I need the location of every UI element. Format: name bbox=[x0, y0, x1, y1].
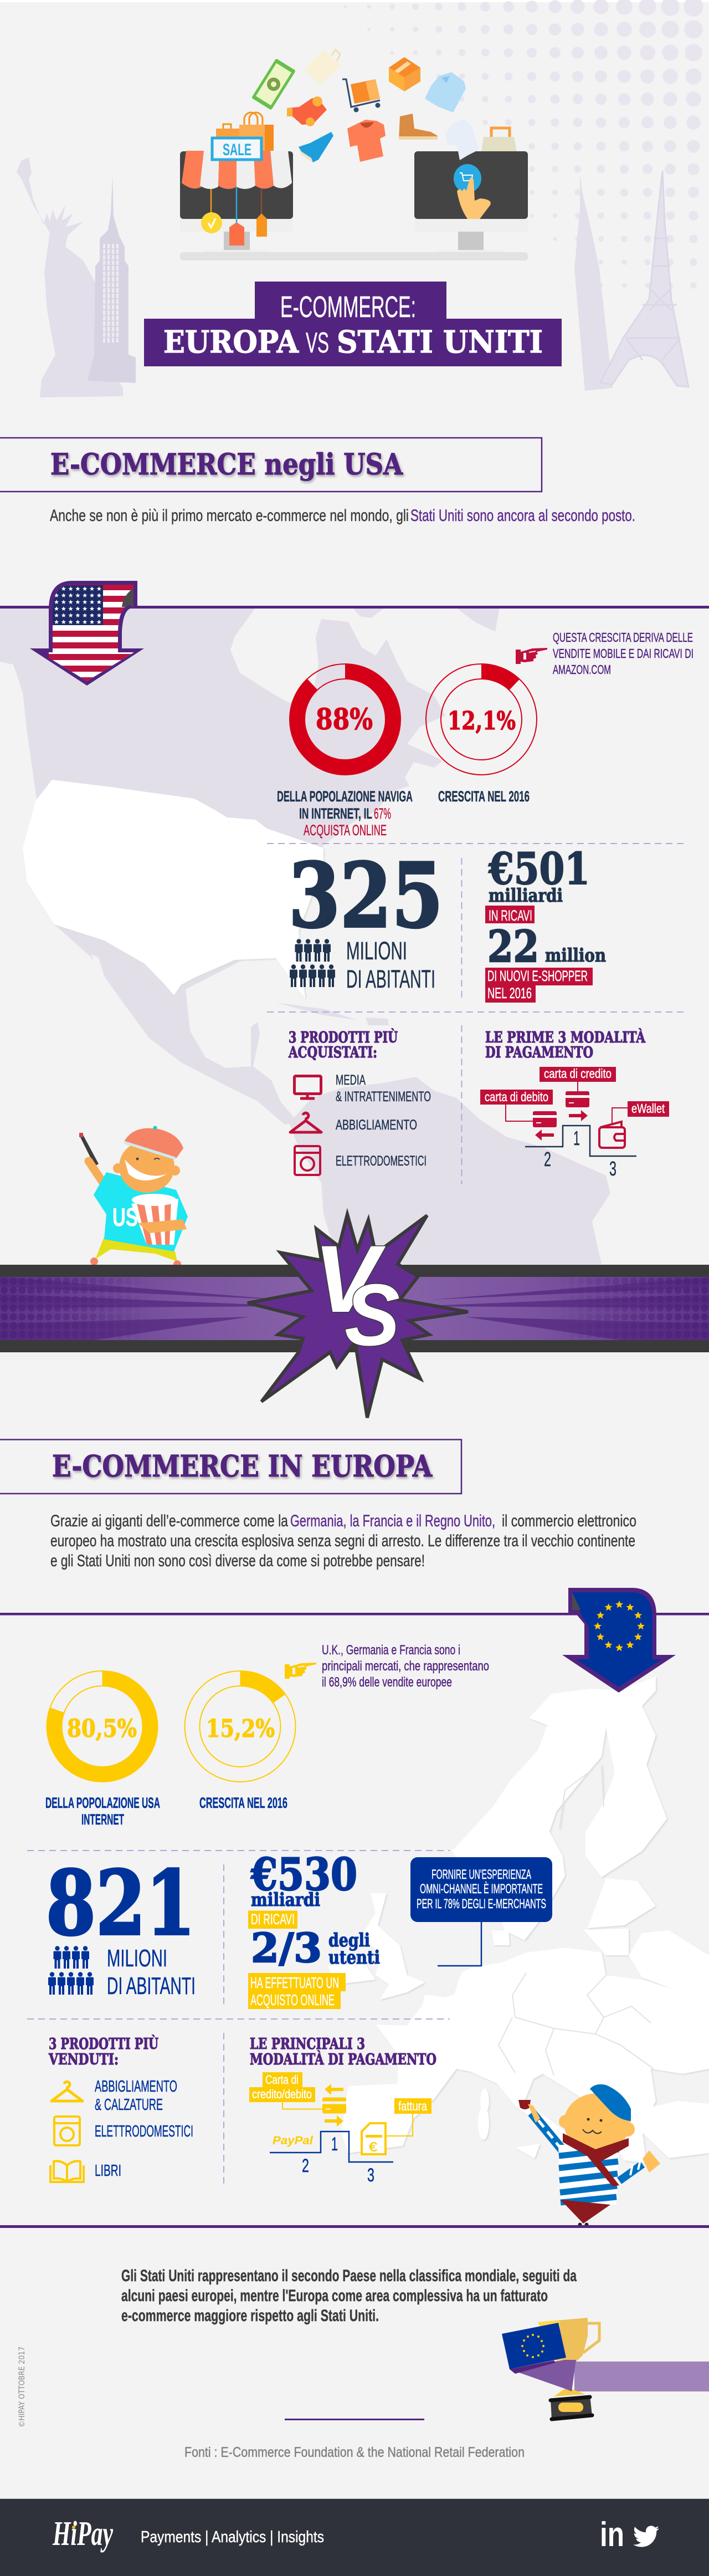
icon: box bbox=[389, 57, 420, 91]
stat: 530 billion revenue: miliardi bbox=[251, 1889, 320, 1910]
illustration: French mascot bbox=[518, 2084, 660, 2227]
logo: HiPay bbox=[52, 2515, 113, 2553]
logo: HiPay: HiPay bbox=[52, 2515, 113, 2553]
cap bbox=[124, 1126, 183, 1158]
stat: 530 billion revenue bbox=[248, 1848, 357, 1929]
credit and debit card: credito/debito bbox=[252, 2087, 312, 2101]
icon: cart with boxes bbox=[342, 79, 380, 112]
chart: 12,1 percent donut: 12,1% bbox=[448, 706, 516, 735]
credit card: carta di credito bbox=[544, 1066, 612, 1081]
podium: 2 bbox=[544, 1148, 551, 1171]
icon: socks bbox=[287, 96, 327, 126]
red scarf bbox=[561, 2133, 629, 2227]
panel: top products USA: 3 PRODOTTI PIÙ bbox=[289, 1028, 398, 1046]
paypal: PayPal bbox=[273, 2134, 314, 2147]
icon: orange t-shirt bbox=[347, 120, 386, 162]
head and face bbox=[113, 1141, 180, 1193]
illustration: trophy with EU flag bbox=[502, 2318, 709, 2420]
VS lettering bbox=[314, 1226, 400, 1364]
heading: e-commerce USA bbox=[0, 438, 542, 492]
stat: 22 million new shoppers: NEL 2016 bbox=[487, 985, 532, 1001]
stat: 530 billion revenue: DI RICAVI bbox=[251, 1911, 295, 1928]
versus band bbox=[0, 1265, 709, 1352]
podium Europe: 1 bbox=[331, 2134, 338, 2155]
stat: 22 million new shoppers bbox=[485, 922, 606, 1003]
shelf bbox=[180, 252, 528, 260]
VS lettering: S bbox=[345, 1266, 400, 1364]
podium bbox=[525, 1126, 636, 1180]
icon: book bbox=[50, 2161, 84, 2182]
illustration: USA mascot bbox=[79, 1126, 188, 1268]
panel: top products Europe: ELETTRODOMESTICI bbox=[95, 2123, 193, 2140]
icon: banknote bbox=[251, 58, 296, 110]
icon: pointing hand yellow bbox=[285, 1663, 316, 1679]
halftone dot background bbox=[344, 0, 703, 289]
beret bbox=[590, 2084, 631, 2121]
stat: two thirds of users: HA EFFETTUATO UN bbox=[250, 1974, 339, 1991]
cart button and hand bbox=[454, 164, 491, 219]
panel: top products Europe: 3 PRODOTTI PIÙ bbox=[49, 2034, 158, 2053]
pants and feet bbox=[90, 1237, 181, 1268]
panel: top products USA bbox=[288, 1028, 431, 1175]
panel: payment methods USA: LE PRIME 3 MODALITÀ bbox=[485, 1028, 646, 1046]
panel: top products USA: ABBIGLIAMENTO bbox=[336, 1117, 417, 1133]
big ben silhouette bbox=[574, 175, 613, 391]
statue of liberty silhouette bbox=[17, 157, 123, 397]
debit card: carta di debito bbox=[485, 1090, 548, 1104]
stat: 22 million new shoppers: million bbox=[545, 944, 606, 966]
flag shadow bbox=[510, 2360, 576, 2391]
pen and raised arm bbox=[79, 1133, 105, 1186]
icon: white shirt bbox=[445, 119, 479, 160]
title: E-COMMERCE: bbox=[280, 290, 416, 324]
trophy base bbox=[551, 2395, 592, 2420]
tagline: Payments | Analytics | Insights bbox=[141, 2528, 324, 2546]
panel: top products Europe: VENDUTI: bbox=[48, 2051, 119, 2068]
ewallet bbox=[599, 1101, 669, 1148]
stat: two thirds of users: ACQUISTO ONLINE bbox=[250, 1991, 335, 2008]
icon: EU flag arrow bbox=[562, 1588, 676, 1693]
shopping bags bbox=[216, 113, 274, 151]
credit and debit card: Carta di bbox=[265, 2073, 299, 2087]
icon: beige bag bbox=[481, 128, 517, 151]
cyan t-shirt: US bbox=[112, 1203, 138, 1231]
text block: growth label: CRESCITA NEL 2016 bbox=[438, 788, 530, 805]
title bbox=[144, 282, 562, 366]
flying products bbox=[251, 50, 517, 162]
text block: growth label Europe: CRESCITA NEL 2016 bbox=[199, 1795, 287, 1811]
stat: two thirds of users: utenti bbox=[328, 1946, 380, 1968]
VS lettering: V bbox=[314, 1226, 386, 1332]
text block: sources: Fonti : E-Commerce Foundation & the National Retail Federation bbox=[184, 2445, 525, 2460]
podium Europe bbox=[270, 2132, 393, 2186]
trophy cup bbox=[538, 2318, 599, 2396]
country borders bbox=[499, 1765, 654, 2076]
panel: payment methods Europe: MODALITÀ DI PAGAMENTO bbox=[250, 2050, 436, 2068]
divider line bottom bbox=[0, 2225, 709, 2228]
text block: internet population label bbox=[277, 788, 413, 839]
stat: 821 million inhabitants: MILIONI bbox=[107, 1945, 167, 1972]
text block: conclusion bbox=[121, 2267, 577, 2325]
icon: hanger yellow bbox=[52, 2082, 83, 2101]
stat: 325 million inhabitants bbox=[289, 844, 443, 993]
panel: top products Europe: LIBRI bbox=[95, 2162, 121, 2180]
title: STATI UNITI bbox=[337, 324, 543, 360]
podium Europe: 2 bbox=[302, 2155, 309, 2176]
text block: internet label Europe bbox=[45, 1795, 160, 1828]
title: EUROPA bbox=[163, 324, 299, 360]
callout: main european markets: principali mercati, che rappresentano bbox=[322, 1659, 489, 1674]
light rays bbox=[0, 1277, 709, 1340]
right arm bbox=[619, 2150, 660, 2181]
chart: 12,1 percent donut bbox=[426, 664, 537, 775]
heading: e-commerce USA: E-COMMERCE negli USA bbox=[50, 448, 403, 482]
text block: Europe intro: il commercio elettronico bbox=[502, 1512, 636, 1530]
podium Europe: 3 bbox=[367, 2165, 374, 2186]
panel: payment methods USA: DI PAGAMENTO bbox=[485, 1044, 593, 1061]
panel: top products USA: ACQUISTATI: bbox=[288, 1044, 377, 1061]
stat: two thirds of users bbox=[248, 1924, 380, 2009]
text block: internet population label: ACQUISTA ONLINE bbox=[304, 822, 387, 839]
callout: omni-channel bbox=[410, 1857, 552, 1966]
striped awning bbox=[182, 151, 292, 189]
text block: internet population label: 67% bbox=[374, 805, 391, 822]
callout: main european markets bbox=[322, 1643, 489, 1690]
chart: 15,2 percent donut: 15,2% bbox=[206, 1715, 275, 1743]
callout: omni-channel: OMNI-CHANNEL È IMPORTANTE bbox=[420, 1882, 543, 1897]
icon: washing machine bbox=[295, 1146, 320, 1175]
map: Europe bbox=[328, 1677, 709, 2163]
stat: 501 billion revenue: milliardi bbox=[489, 885, 563, 906]
divider: short line bbox=[285, 2419, 424, 2420]
hanging tags bbox=[201, 187, 267, 246]
right checkout monitor bbox=[414, 151, 528, 254]
sale sign: SALE bbox=[223, 141, 251, 159]
chart: 15,2 percent donut bbox=[185, 1671, 296, 1782]
stat: 325 million inhabitants: 325 bbox=[289, 844, 443, 948]
stat: two thirds of users: degli bbox=[328, 1929, 370, 1951]
callout: omni-channel: PER IL 78% DEGLI E-MERCHANTS bbox=[417, 1897, 546, 1911]
credit and debit card bbox=[249, 2072, 346, 2127]
text block: internet population label: IN INTERNET, IL bbox=[299, 805, 372, 822]
stat: 501 billion revenue: €501 bbox=[488, 843, 590, 895]
panel: top products USA: ELETTRODOMESTICI bbox=[336, 1153, 427, 1169]
icon: people Europe bbox=[48, 1946, 94, 1995]
stat: 821 million inhabitants: 821 bbox=[46, 1851, 196, 1955]
icon: twitter bbox=[633, 2526, 659, 2547]
stat: 530 billion revenue: €530 bbox=[250, 1848, 357, 1900]
stat: 325 million inhabitants: MILIONI bbox=[346, 937, 407, 965]
halftone dots right bbox=[595, 1278, 708, 1340]
icon: blue shirt bbox=[425, 72, 466, 113]
popcorn bucket bbox=[131, 1194, 187, 1245]
text block: USA intro: Stati Uniti sono ancora al secondo posto. bbox=[410, 507, 635, 525]
stat: 22 million new shoppers: DI NUOVI E-SHOPPER bbox=[487, 968, 588, 984]
invoice: € bbox=[369, 2140, 378, 2155]
panel: payment methods Europe: LE PRINCIPALI 3 bbox=[250, 2036, 365, 2053]
map: USA highlighted bbox=[23, 780, 323, 999]
chart: 88 percent donut: 88% bbox=[316, 703, 373, 737]
chart: 88 percent donut bbox=[290, 664, 400, 775]
callout: main european markets: U.K., Germania e Francia sono i bbox=[322, 1643, 460, 1658]
stat: 325 million inhabitants: DI ABITANTI bbox=[346, 965, 435, 993]
cyan t-shirt bbox=[94, 1172, 188, 1251]
chart: 80,5 percent donut: 80,5% bbox=[67, 1715, 137, 1743]
icon: blue sneaker bbox=[299, 132, 333, 162]
text block: Europe intro bbox=[50, 1512, 636, 1570]
callout: main european markets: il 68,9% delle vendite europee bbox=[322, 1675, 452, 1690]
EU flag bbox=[502, 2323, 566, 2369]
invoice bbox=[362, 2098, 431, 2155]
striped torso bbox=[558, 2145, 619, 2205]
icon: people bbox=[290, 939, 335, 987]
sale sign bbox=[212, 138, 261, 160]
title: VS bbox=[306, 327, 329, 359]
starburst VS badge bbox=[248, 1214, 468, 1418]
stat: 22 million new shoppers: 22 bbox=[487, 922, 539, 972]
stat: 501 billion revenue bbox=[485, 843, 590, 924]
icon: monitor bbox=[295, 1076, 321, 1098]
wine glass and raised arm bbox=[518, 2100, 563, 2150]
panel: top products USA: MEDIA bbox=[336, 1072, 366, 1088]
text block: conclusion: e-commerce maggiore rispetto agli Stati Uniti. bbox=[121, 2307, 379, 2325]
left shop monitor bbox=[180, 113, 293, 254]
text block: internet population label: DELLA POPOLAZIONE NAVIGA bbox=[277, 788, 413, 805]
eiffel tower silhouette bbox=[600, 171, 689, 387]
callout: mobile and amazon: AMAZON.COM bbox=[553, 662, 611, 677]
stat: 821 million inhabitants: DI ABITANTI bbox=[107, 1972, 196, 2000]
debit card bbox=[480, 1090, 557, 1141]
icon: hanger bbox=[290, 1113, 321, 1132]
map: north and south america bbox=[0, 608, 610, 1264]
divider line USA bbox=[0, 606, 709, 609]
icon: washing machine yellow bbox=[54, 2117, 80, 2145]
callout: omni-channel: FORNIRE UN'ESPERIENZA bbox=[431, 1867, 531, 1882]
empire state building silhouette bbox=[88, 176, 136, 383]
icon: linkedin: in bbox=[600, 2516, 624, 2554]
podium: 1 bbox=[573, 1127, 580, 1149]
text block: Europe intro: Grazie ai giganti dell’e-commerce come la bbox=[50, 1512, 288, 1530]
panel: payment methods USA bbox=[480, 1028, 669, 1180]
panel: top products Europe bbox=[48, 2034, 193, 2182]
halftone dots left bbox=[1, 1278, 114, 1340]
text block: Europe intro: Germania, la Francia e il Regno Unito, bbox=[290, 1512, 495, 1530]
text block: Europe intro: e gli Stati Uniti non sono così diverse da come si potrebbe pensare! bbox=[50, 1552, 425, 1570]
chart: 80,5 percent donut bbox=[47, 1671, 157, 1782]
panel: top products Europe: ABBIGLIAMENTO bbox=[95, 2078, 177, 2095]
heading: e-commerce Europe: E-COMMERCE IN EUROPA bbox=[52, 1449, 433, 1484]
ewallet: eWallet bbox=[631, 1101, 665, 1116]
stat: 501 billion revenue: IN RICAVI bbox=[489, 907, 532, 924]
panel: top products Europe: & CALZATURE bbox=[95, 2096, 163, 2114]
EU stars bbox=[594, 1601, 645, 1651]
stat: 821 million inhabitants bbox=[46, 1851, 196, 2000]
text block: internet label Europe: INTERNET bbox=[81, 1811, 124, 1828]
text block: internet label Europe: DELLA POPOLAZIONE USA bbox=[45, 1795, 160, 1811]
invoice: fattura bbox=[398, 2099, 427, 2113]
icon: boot bbox=[399, 114, 438, 140]
icon: US flag arrow bbox=[30, 581, 144, 686]
head and moustache bbox=[559, 2093, 635, 2152]
text block: USA intro: Anche se non è più il primo mercato e-commerce nel mondo, gli bbox=[50, 507, 409, 525]
divider line Europe bbox=[0, 1613, 709, 1615]
panel: footer bbox=[0, 2498, 709, 2576]
icon: cream bag bbox=[304, 50, 341, 85]
callout: mobile and amazon bbox=[553, 630, 693, 677]
heading: e-commerce Europe bbox=[0, 1440, 461, 1494]
stat: two thirds of users: 2/3 bbox=[251, 1924, 322, 1971]
panel: payment methods Europe bbox=[249, 2036, 436, 2186]
podium: 3 bbox=[609, 1157, 616, 1180]
icon: pointing hand red bbox=[516, 648, 547, 664]
panel: header illustration bbox=[17, 0, 703, 397]
text block: copyright: ©HIPAY OTTOBRE 2017 bbox=[18, 2347, 27, 2427]
panel: top products USA: & INTRATTENIMENTO bbox=[336, 1089, 431, 1105]
credit card bbox=[540, 1066, 616, 1121]
